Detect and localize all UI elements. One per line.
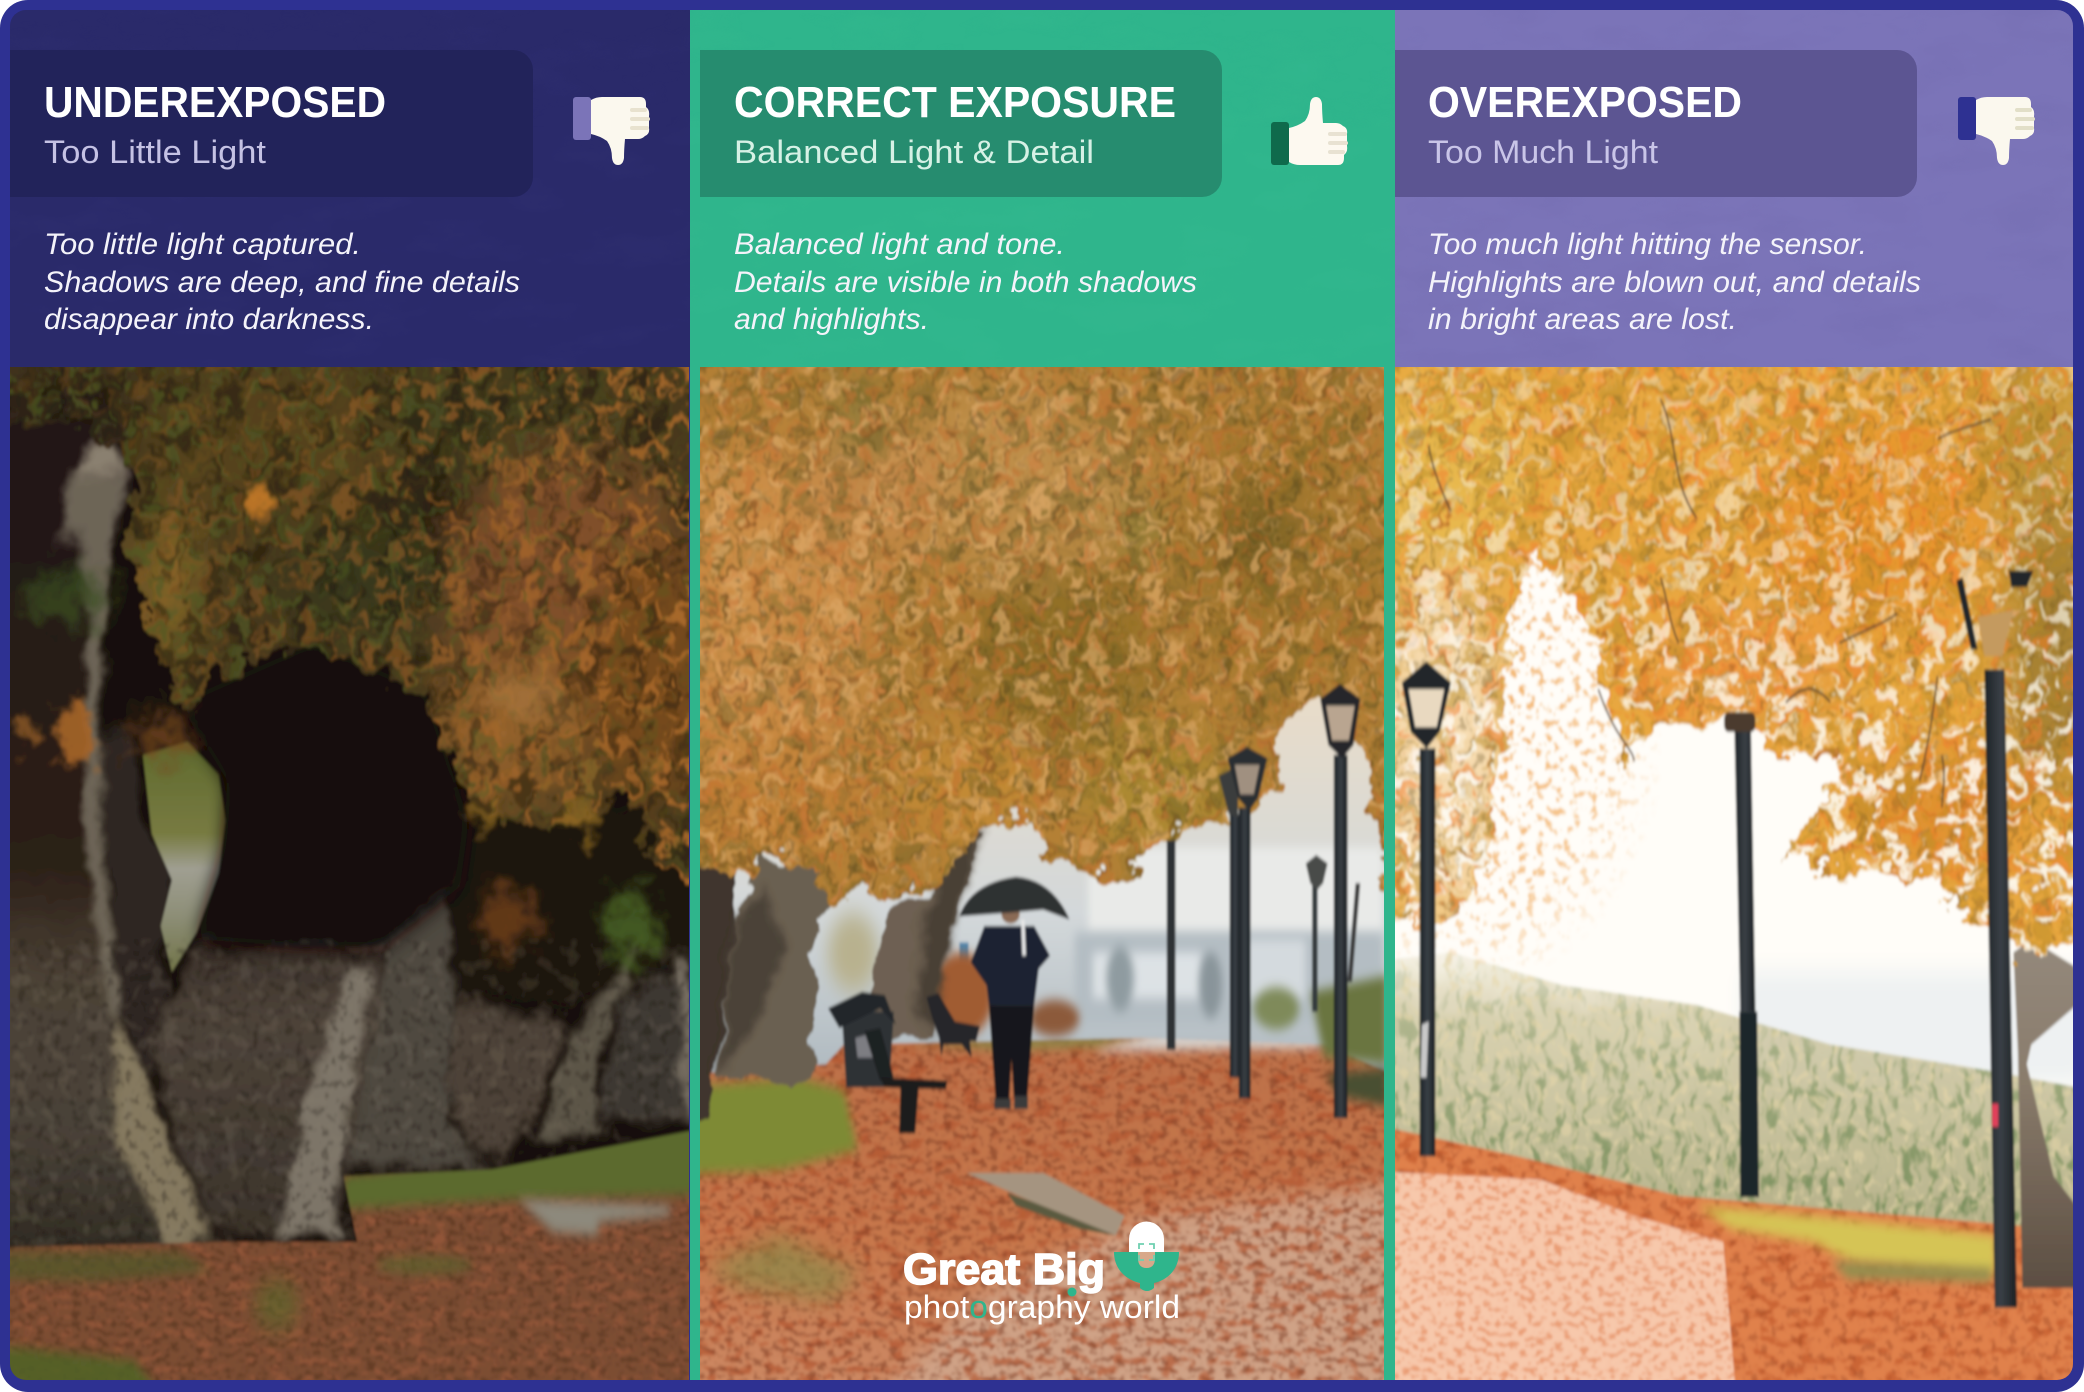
canopy foliage xyxy=(1339,294,2084,985)
heading: underexposed: UNDEREXPOSED xyxy=(44,78,386,127)
left lamp xyxy=(1402,661,1451,1156)
description: correct exposure xyxy=(734,228,1197,336)
lamp posts xyxy=(1167,684,1360,1118)
panel: correct exposure xyxy=(645,10,1445,1392)
bare branches xyxy=(1429,399,1991,808)
dark cavity xyxy=(179,643,469,946)
lamp posts xyxy=(1402,571,2034,1308)
middle post xyxy=(1724,712,1759,1197)
pill: overexposed heading xyxy=(1395,50,1917,197)
photo: dark autumn trees xyxy=(0,294,745,1392)
ground with fallen leaves xyxy=(0,1084,745,1392)
right post and lamp xyxy=(1956,571,2034,1308)
description: underexposed: Too little light captured. xyxy=(44,228,361,261)
canopy foliage xyxy=(645,294,1445,952)
description: correct exposure: and highlights. xyxy=(734,303,929,336)
heading: correct exposure: CORRECT EXPOSURE xyxy=(734,78,1176,127)
photo: bright autumn park xyxy=(1339,294,2084,1392)
subheading: too little light: Too Little Light xyxy=(44,134,266,170)
tree trunks xyxy=(681,821,984,1124)
logo: great big photography world: Great Big xyxy=(903,1245,1105,1294)
pale far haze xyxy=(1741,972,2084,1084)
tree canopy foliage xyxy=(0,294,745,887)
description: underexposed xyxy=(44,228,520,336)
middle lamp xyxy=(1227,747,1267,1099)
subheading: balanced light and detail: Balanced Light & Detail xyxy=(734,134,1094,170)
pill: correct exposure heading xyxy=(700,50,1222,197)
description: underexposed: Shadows are deep, and fine details xyxy=(44,266,520,299)
description: overexposed xyxy=(1428,228,1921,336)
person with umbrella xyxy=(959,877,1069,1109)
foggy background xyxy=(645,689,1445,1097)
icon: thumbs down xyxy=(1958,97,2034,165)
trunk bark texture xyxy=(0,939,700,1262)
central trunk mass xyxy=(147,946,384,1242)
ground with leaves xyxy=(645,1028,1445,1392)
right tree trunk xyxy=(2013,939,2084,1288)
logo: great big photography world xyxy=(903,1222,1180,1325)
subheading: too much light: Too Much Light xyxy=(1428,134,1658,170)
bushes xyxy=(930,952,1387,1107)
heading: overexposed: OVEREXPOSED xyxy=(1428,78,1742,127)
green opening between trunks xyxy=(143,742,225,972)
description: underexposed: disappear into darkness. xyxy=(44,303,374,336)
logo icon xyxy=(1114,1222,1179,1291)
description: overexposed: Too much light hitting the sensor. xyxy=(1428,228,1867,261)
left trunk xyxy=(0,399,210,1255)
background trunks xyxy=(339,788,745,1173)
trash bin and bench xyxy=(828,992,947,1133)
ground with leaves xyxy=(1339,1110,2084,1392)
panel: underexposed xyxy=(0,10,745,1392)
icon: thumbs up xyxy=(1271,97,1347,165)
sparse orange twigs on left xyxy=(1339,531,1661,966)
panel: overexposed xyxy=(1339,10,2084,1392)
pill: underexposed heading xyxy=(10,50,533,197)
bright leaf clusters xyxy=(17,488,658,959)
icon: thumbs down xyxy=(573,97,649,165)
lamp behind xyxy=(1219,769,1241,1077)
logo: great big photography world: photography world xyxy=(904,1289,1180,1325)
description: correct exposure: Details are visible in both shadows xyxy=(734,266,1197,299)
description: overexposed: Highlights are blown out, and details xyxy=(1428,266,1921,299)
thin tilted post xyxy=(1347,883,1360,982)
distant bench xyxy=(926,993,980,1058)
photo: autumn park with walker xyxy=(645,294,1445,1392)
near lamp xyxy=(1320,684,1360,1118)
reeds xyxy=(1339,939,2084,1281)
description: correct exposure: Balanced light and tone. xyxy=(734,228,1065,261)
far pole xyxy=(1167,840,1175,1050)
description: overexposed: in bright areas are lost. xyxy=(1428,303,1737,336)
small far lamp xyxy=(1306,855,1328,1012)
